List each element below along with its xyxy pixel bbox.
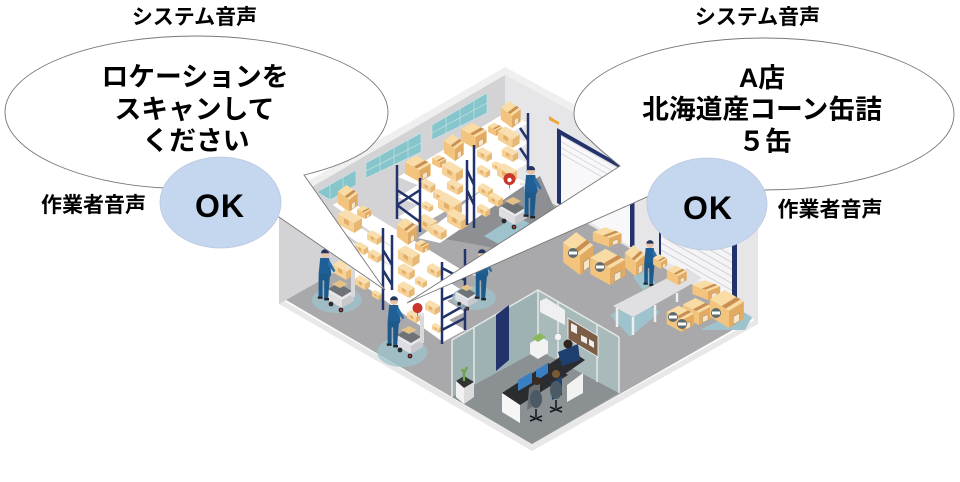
air conditioner xyxy=(540,298,565,325)
label: system voice left: システム音声 xyxy=(132,6,257,29)
window: right xyxy=(432,93,487,140)
bubble text right: A店 xyxy=(739,63,785,93)
boxes on pallets: left group xyxy=(563,227,645,285)
shutter door: front xyxy=(659,186,737,303)
label: worker voice right: 作業者音声 xyxy=(778,198,882,222)
speech bubble: system voice left xyxy=(5,36,388,290)
OK reply left: OK xyxy=(195,188,245,224)
desks and staff xyxy=(502,333,585,423)
bubble text left: ください xyxy=(142,126,250,156)
worker and cart: centre aisle xyxy=(377,296,427,367)
bubble text right xyxy=(642,63,882,156)
warehouse building xyxy=(279,67,758,451)
right back wall xyxy=(505,69,758,322)
worker and cart: behind rack xyxy=(452,249,496,311)
worker and cart: left aisle xyxy=(312,249,362,313)
door xyxy=(496,305,509,371)
window: far left xyxy=(317,170,356,200)
label: system voice right: システム音声 xyxy=(695,6,820,29)
packing worker xyxy=(633,240,667,290)
shutter door: back xyxy=(557,128,634,247)
outer base shadow xyxy=(279,298,758,451)
worker reply bubble right xyxy=(647,158,767,250)
front rack xyxy=(333,185,465,344)
worker and cart: back aisle xyxy=(499,166,542,229)
bubble text right: ５缶 xyxy=(738,126,792,156)
floor xyxy=(286,176,752,444)
plant cabinet xyxy=(456,367,474,404)
left back wall xyxy=(279,69,505,304)
boxes on pallets: right group xyxy=(667,280,752,332)
label: worker voice left: 作業者音声 xyxy=(41,194,146,217)
OK reply right: OK xyxy=(683,190,733,226)
window: middle xyxy=(366,133,421,178)
worker reply bubble left xyxy=(160,157,281,248)
speech bubble: system voice right xyxy=(407,38,954,303)
back rack xyxy=(397,101,528,243)
bubble text left xyxy=(101,62,289,156)
bubble text right: 北海道産コーン缶詰 xyxy=(642,94,882,124)
bubble text left: ロケーションを xyxy=(101,62,289,92)
wall top edge xyxy=(279,67,758,212)
orange wall light xyxy=(549,116,559,125)
packing table xyxy=(610,265,702,337)
notice board xyxy=(568,318,598,357)
location pin xyxy=(504,173,516,191)
bubble text left: スキャンして xyxy=(115,94,274,124)
office xyxy=(452,290,619,444)
copier cabinet xyxy=(530,337,548,359)
aisle floor markings xyxy=(440,176,556,250)
